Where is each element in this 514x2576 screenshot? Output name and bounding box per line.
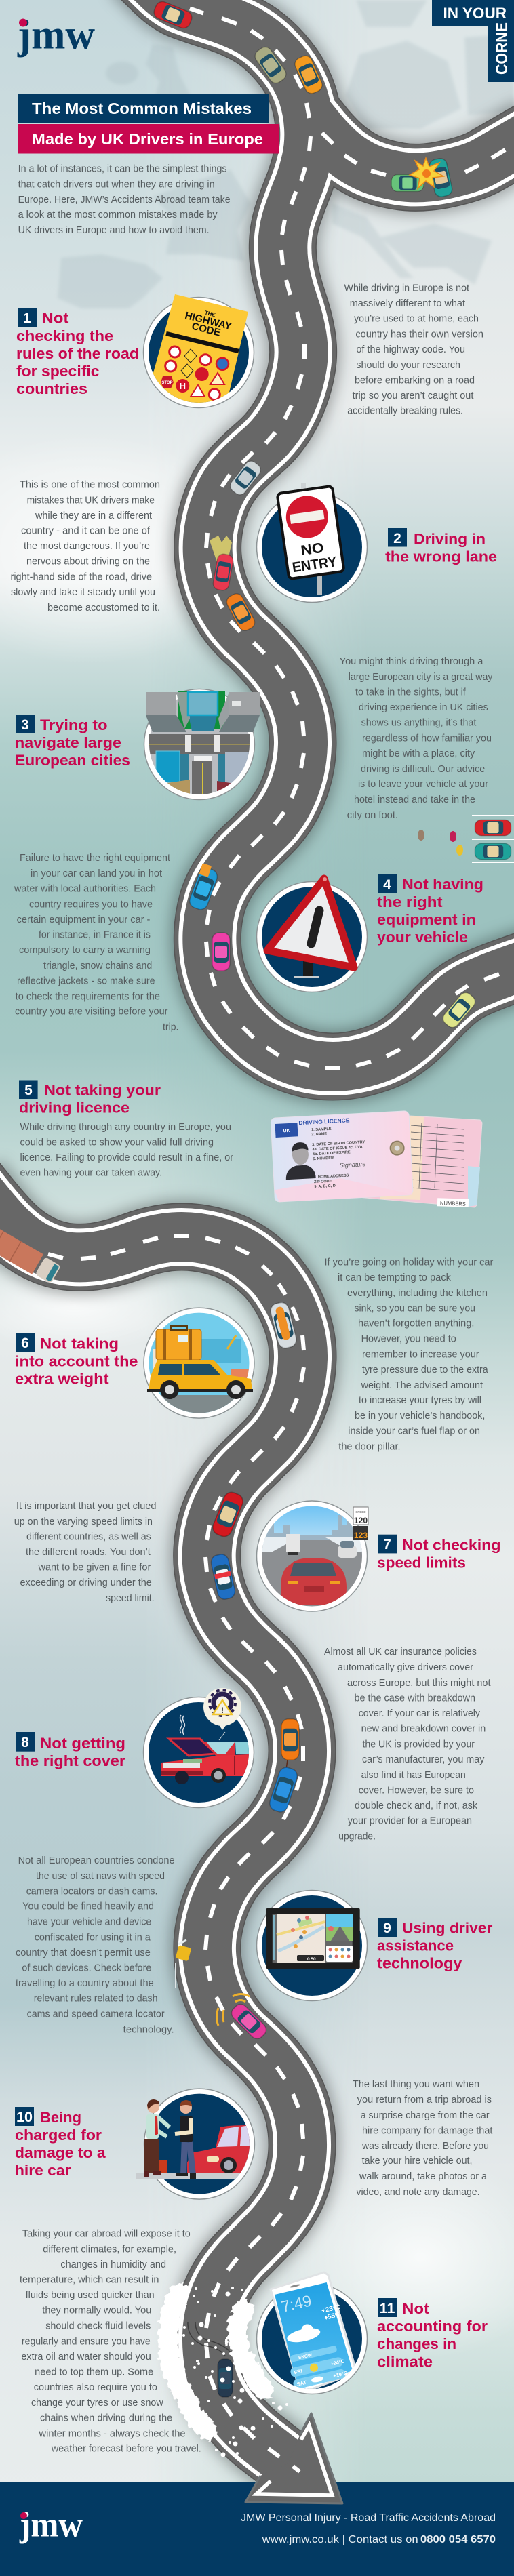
body text 6: However, you need to xyxy=(361,1334,456,1345)
body text 8: across Europe, but this might not xyxy=(347,1678,491,1689)
body text 1: massively different to what xyxy=(350,298,465,309)
body text 11: winter months - always check the xyxy=(38,2428,186,2439)
road arrow head over the footer xyxy=(245,2413,342,2503)
icon: speed limit scene: 120 xyxy=(354,1516,368,1525)
footer logo: jmw xyxy=(19,2506,83,2545)
heading 5: 5 xyxy=(24,1083,33,1098)
body text 5: could be asked to show your valid full driving xyxy=(20,1137,214,1148)
body text 1 xyxy=(344,283,483,417)
licence front: 2. NAME xyxy=(311,1132,328,1137)
body text 11: chains when driving during the xyxy=(40,2413,172,2423)
body text 4 xyxy=(14,853,178,1033)
body text 1: before embarking on a road xyxy=(355,375,475,386)
figure: man on the left xyxy=(144,2099,170,2177)
licence front: 9. A, B, C, D xyxy=(314,1184,336,1189)
heading 10: charged for xyxy=(15,2127,102,2144)
body text 6: remember to increase your xyxy=(362,1349,479,1360)
body text 9: cams and speed camera locator xyxy=(27,2009,165,2020)
body text 9 xyxy=(16,1855,175,2035)
heading 8: Not getting xyxy=(40,1735,125,1752)
body text 3: driving is difficult. Our advice xyxy=(361,764,485,775)
body text 7: want to be given a fine for xyxy=(38,1563,151,1573)
licence front: 4a. DATE OF ISSUE 4c. DVA xyxy=(312,1145,363,1152)
licence front: 5. NUMBER xyxy=(313,1156,334,1161)
body text 9: confiscated for using it in a xyxy=(35,1932,151,1943)
heading 5: Not taking your xyxy=(44,1082,161,1098)
body text 4: reflective jackets - so make sure xyxy=(17,975,155,986)
icon: speed limit scene: SPEED xyxy=(355,1510,366,1514)
body text 4: in your car can land you in hot xyxy=(31,868,162,879)
body text 6: tyre pressure due to the extra xyxy=(362,1365,489,1375)
body text 7: different countries, as well as xyxy=(26,1531,151,1542)
body text 6: it can be tempting to pack xyxy=(338,1272,452,1283)
body text 1: country has their own version xyxy=(355,329,483,340)
body text 7: speed limit. xyxy=(106,1593,155,1604)
icon: sat nav xyxy=(256,1890,368,2001)
body text 3: You might think driving through a xyxy=(340,656,483,667)
body text 2: country - and it can be one of xyxy=(21,525,151,536)
heading 3: European cities xyxy=(15,752,130,769)
heading 6: Not taking xyxy=(40,1335,119,1352)
body text 5: even having your car taken away. xyxy=(20,1168,162,1179)
body text 2: This is one of the most common xyxy=(20,480,160,491)
icon: driving licence cards xyxy=(271,1111,482,1207)
body text 7: exceeding or driving under the xyxy=(20,1577,152,1588)
body text 4: to check the requirements for the xyxy=(16,991,160,1002)
icon: warning speech bubble: ! xyxy=(221,1706,224,1715)
icon: weather app phone: +19°C xyxy=(332,2370,349,2379)
icon: weather app phone: SAT xyxy=(296,2379,307,2388)
licence front: 3. DATE OF BIRTH COUNTRY xyxy=(312,1140,365,1147)
footer contact details: www.jmw.co.uk | Contact us on xyxy=(262,2534,418,2545)
heading 3: 3 xyxy=(21,717,29,733)
heading 7: speed limits xyxy=(377,1554,466,1571)
icon: highway code book xyxy=(144,294,254,408)
body text 10: you return from a trip abroad is xyxy=(357,2095,492,2106)
body text 3: hotel instead and take in the xyxy=(354,794,475,805)
icon: broken down car xyxy=(144,1688,254,1807)
icon: sat nav: 0.50 xyxy=(307,1957,316,1962)
licence front: UK xyxy=(283,1129,290,1133)
body text 8: cover. However, be sure to xyxy=(359,1785,474,1796)
heading 2 xyxy=(385,528,497,565)
body text 1: While driving in Europe is not xyxy=(344,283,469,294)
section 5: driving licence xyxy=(19,1081,482,1207)
body text 1: accidentally breaking rules. xyxy=(347,406,463,417)
body text 1: of the highway code. You xyxy=(356,344,465,355)
title: The Most Common Mistakes xyxy=(32,100,252,117)
figure: man on the right xyxy=(175,2100,196,2179)
body text 5 xyxy=(20,1122,233,1179)
icon: highway code book: CODE xyxy=(191,321,222,339)
body text 4: country you are visiting before your xyxy=(15,1007,168,1018)
heading 9: assistance xyxy=(377,1937,454,1954)
body text 9: You could be fined heavily and xyxy=(22,1901,154,1912)
heading 9: technology xyxy=(377,1955,462,1972)
logo: jmw xyxy=(17,12,95,58)
body text 11: they normally would. You xyxy=(42,2306,151,2316)
body text 4: triangle, snow chains and xyxy=(43,961,152,971)
speed camera xyxy=(176,1940,191,1988)
body text 4: compulsory to carry a warning xyxy=(19,945,151,956)
body text 8: be the case with breakdown xyxy=(354,1693,475,1704)
heading 1: 1 xyxy=(23,310,31,326)
heading 9: 9 xyxy=(383,1920,391,1936)
body text 3: to take in the sights, but if xyxy=(355,687,467,698)
intro text: UK drivers in Europe and how to avoid them. xyxy=(18,225,210,236)
body text 5: While driving through any country in Europe, you xyxy=(20,1122,231,1133)
heading 5: driving licence xyxy=(19,1100,130,1116)
body text 8 xyxy=(324,1647,491,1843)
footer contact details xyxy=(241,2512,496,2545)
body text 8: the UK is provided by your xyxy=(362,1739,475,1750)
intro text: that catch drivers out when they are driving in xyxy=(18,179,215,190)
heading 4 xyxy=(377,874,483,946)
icon: highway code book: THE xyxy=(204,310,216,318)
section 6: extra weight xyxy=(15,1257,494,1452)
body text 6: be in your vehicle’s handbook, xyxy=(355,1411,485,1422)
body text 4: water with local authorities. Each xyxy=(14,884,156,895)
body text 8: your provider for a European xyxy=(348,1816,472,1827)
icon: weather app phone: ♦55% xyxy=(323,2311,342,2322)
icon: city junction xyxy=(144,689,260,802)
icon: highway code book: HIGHWAY xyxy=(184,310,233,332)
licence front: Signature xyxy=(340,1161,366,1169)
section 3: cities xyxy=(15,656,493,821)
body text 8: double check and, if not, ask xyxy=(355,1800,478,1811)
body text 9: the use of sat navs with speed xyxy=(36,1871,165,1882)
body text 4: Failure to have the right equipment xyxy=(20,853,170,864)
heading 2: Driving in xyxy=(414,530,486,547)
body text 7: It is important that you get clued xyxy=(16,1501,156,1512)
heading 4: equipment in xyxy=(377,911,476,928)
body text 8: upgrade. xyxy=(338,1832,376,1843)
body text 2: right-hand side of the road, drive xyxy=(11,572,152,583)
heading 7 xyxy=(377,1535,500,1571)
title xyxy=(18,94,279,153)
body text 2: the most dangerous. If you’re xyxy=(24,541,150,552)
section 9: driver assistance xyxy=(16,1855,493,2035)
body text 8: Almost all UK car insurance policies xyxy=(324,1647,477,1657)
body text 11: should check fluid levels xyxy=(45,2321,151,2332)
heading 4: your vehicle xyxy=(377,929,468,946)
heading 4: Not having xyxy=(402,876,483,893)
icon: weather app phone xyxy=(256,2272,368,2394)
icon: weather app phone: +23°C xyxy=(321,2303,341,2315)
body text 4: trip. xyxy=(163,1022,178,1033)
body text 10: The last thing you want when xyxy=(353,2079,479,2090)
corner badge: in your corner: CORNE xyxy=(493,22,511,75)
body text 9: technology. xyxy=(123,2024,174,2035)
heading 3: Trying to xyxy=(40,717,107,733)
heading 4: 4 xyxy=(383,877,391,893)
section 2: wrong lane xyxy=(11,480,497,613)
icon: hire car handover xyxy=(136,2089,255,2199)
icon: warning speech bubble xyxy=(203,1688,241,1730)
body text 8: car’s manufacturer, you may xyxy=(362,1754,485,1765)
heading 11: accounting for xyxy=(377,2318,488,2335)
body text 2: become accustomed to it. xyxy=(47,603,160,613)
section 4: equipment xyxy=(14,853,483,1033)
body text 1: you’re used to at home, each xyxy=(354,314,479,325)
heading 8: the right cover xyxy=(15,1752,125,1769)
body text 1: trip so you aren’t caught out xyxy=(353,390,473,401)
intro text: a look at the most common mistakes made by xyxy=(18,209,218,220)
heading 7: Not checking xyxy=(402,1536,500,1554)
heading 10: Being xyxy=(40,2109,81,2126)
icon: car with luggage xyxy=(144,1308,254,1418)
icon: highway code book: H xyxy=(180,381,186,391)
body text 3: is to leave your vehicle at your xyxy=(358,779,488,790)
body text 9: camera locators or dash cams. xyxy=(26,1886,158,1897)
heading 11: changes in xyxy=(377,2335,456,2352)
crash on the branch road xyxy=(391,157,454,198)
body text 9: Not all European countries condone xyxy=(18,1855,175,1866)
body text 6: everything, including the kitchen xyxy=(347,1288,488,1299)
footer contact details: 0800 054 6570 xyxy=(420,2534,496,2545)
section 8: right cover xyxy=(15,1647,491,1843)
icon: speed limit scene xyxy=(256,1501,368,1611)
footer band xyxy=(0,2482,514,2576)
body text 8: cover. If your car is relatively xyxy=(359,1708,481,1719)
body text 10: a surprise charge from the car xyxy=(361,2110,490,2121)
body text 11: countries also require you to xyxy=(34,2382,157,2393)
section 1: rules of the road xyxy=(16,283,483,417)
licence front: 4b. DATE OF EXPIRE xyxy=(313,1150,351,1156)
icon: no entry sign: NO xyxy=(300,540,325,559)
body text 10: was already there. Before you xyxy=(361,2141,489,2152)
icon: no entry sign xyxy=(256,483,368,602)
body text 1: should do your research xyxy=(356,360,460,371)
icon: no entry sign: ENTRY xyxy=(291,554,338,576)
body text 3: might be with a place, city xyxy=(362,748,475,759)
body text 2: mistakes that UK drivers make xyxy=(27,495,155,506)
body text 11 xyxy=(20,2229,201,2455)
body text 11: changes in humidity and xyxy=(60,2259,166,2270)
body text 3 xyxy=(340,656,493,821)
body text 7 xyxy=(14,1501,156,1604)
heading 9: Using driver xyxy=(402,1919,493,1936)
body text 2 xyxy=(11,480,160,613)
corner badge: in your corner xyxy=(432,0,514,82)
body text 10: take your hire vehicle out, xyxy=(362,2156,472,2167)
title: Made by UK Drivers in Europe xyxy=(32,130,263,148)
body text 11: extra oil and water should you xyxy=(21,2352,151,2362)
icon: weather app phone: SNOW xyxy=(298,2353,313,2360)
snow section xyxy=(168,2287,288,2457)
intro text: In a lot of instances, it can be the simplest things xyxy=(18,164,227,175)
body text 6: If you’re going on holiday with your car xyxy=(324,1257,494,1268)
body text 6 xyxy=(324,1257,494,1452)
licence front: ZIP CODE xyxy=(314,1180,332,1184)
body text 10: hire company for damage that xyxy=(362,2125,492,2136)
heading 8 xyxy=(15,1732,125,1769)
heading 11: climate xyxy=(377,2353,433,2370)
body text 8: new and breakdown cover in xyxy=(361,1724,486,1735)
licence front: 8. HOME ADDRESS xyxy=(314,1173,349,1180)
footer contact details: JMW Personal Injury - Road Traffic Accidents Abroad xyxy=(241,2512,496,2524)
car park and pedestrians xyxy=(418,816,514,862)
heading 6: into account the xyxy=(15,1353,138,1369)
body text 3: regardless of how familiar you xyxy=(362,733,492,744)
body text 10: walk around, take photos or a xyxy=(359,2171,488,2182)
heading 6: extra weight xyxy=(15,1371,109,1388)
heading 7: 7 xyxy=(383,1537,391,1552)
body text 9: of such devices. Check before xyxy=(22,1963,151,1973)
licence front: DRIVING LICENCE xyxy=(298,1116,350,1126)
body text 2: slowly and take it steady until you xyxy=(11,587,155,598)
body text 11: change your tyres or use snow xyxy=(31,2398,163,2409)
heading 1: countries xyxy=(16,380,87,397)
body text 3: driving experience in UK cities xyxy=(359,702,488,713)
intro text: Europe. Here, JMW’s Accidents Abroad team take xyxy=(18,195,231,205)
heading 11 xyxy=(377,2298,488,2370)
section 7: speed limits xyxy=(14,1501,501,1611)
body text 9: country that doesn’t permit use xyxy=(16,1948,151,1958)
heading 1: checking the xyxy=(16,327,113,344)
section 10: hire car xyxy=(15,2079,492,2199)
body text 11: weather forecast before you travel. xyxy=(51,2444,201,2455)
heading 1: for specific xyxy=(16,363,99,380)
body text 5: licence. Failing to provide could result in a fine, or xyxy=(20,1152,233,1163)
body text 6: haven’t forgotten anything. xyxy=(358,1319,474,1329)
body text 11: different climates, for example, xyxy=(43,2244,176,2255)
body text 3: city on foot. xyxy=(347,810,398,821)
icon: weather app phone: +24°C xyxy=(330,2358,346,2367)
heading 1 xyxy=(16,308,139,397)
body text 6: weight. The advised amount xyxy=(361,1380,483,1391)
body text 9: relevant rules related to dash xyxy=(34,1994,157,2005)
heading 10: hire car xyxy=(15,2162,71,2179)
body text 9: have your vehicle and device xyxy=(27,1917,151,1928)
heading 1: Not xyxy=(41,310,69,327)
heading 6: 6 xyxy=(21,1335,29,1351)
section 11: climate xyxy=(20,2229,488,2455)
heading 11: 11 xyxy=(380,2301,395,2316)
licence front: 1. SAMPLE xyxy=(311,1127,332,1132)
heading 2: the wrong lane xyxy=(385,548,497,565)
icon: warning triangle xyxy=(256,877,368,992)
heading 6 xyxy=(15,1333,138,1388)
body text 8: automatically give drivers cover xyxy=(338,1662,473,1673)
body text 3: shows us anything, it’s that xyxy=(361,718,476,729)
body text 11: Taking your car abroad will expose it to xyxy=(22,2229,191,2240)
heading 5 xyxy=(19,1081,161,1116)
heading 4: the right xyxy=(377,893,443,910)
heading 3: navigate large xyxy=(15,734,121,751)
body text 4: country requires you to have xyxy=(29,899,153,910)
body text 2: while they are in a different xyxy=(35,510,152,521)
icon: highway code book: STOP xyxy=(161,381,173,385)
heading 3 xyxy=(15,715,130,769)
body text 10 xyxy=(353,2079,492,2198)
heading 2: 2 xyxy=(393,531,401,546)
body text 6: the door pillar. xyxy=(338,1441,401,1452)
body text 11: temperature, which can result in xyxy=(20,2274,159,2285)
body text 4: certain equipment in your car - xyxy=(17,914,151,925)
corner badge: in your corner: IN YOUR xyxy=(443,5,507,22)
body text 6: to increase your tyres by will xyxy=(359,1395,481,1406)
body text 10: video, and note any damage. xyxy=(356,2187,480,2198)
body text 11: regularly and ensure you have xyxy=(22,2336,151,2347)
body text 7: the different roads. You don’t xyxy=(26,1547,151,1558)
heading 1: rules of the road xyxy=(16,345,139,362)
body text 9: travelling to a country about the xyxy=(16,1978,154,1989)
body text 3: large European city is a great way xyxy=(349,672,493,683)
intro text xyxy=(18,164,231,236)
body text 6: sink, so you can be sure you xyxy=(354,1303,475,1314)
body text 11: need to top them up. Some xyxy=(35,2367,153,2378)
body text 6: inside your car’s fuel flap or on xyxy=(348,1426,480,1437)
background map of Europe xyxy=(58,0,514,308)
heading 9 xyxy=(377,1918,493,1972)
heading 10 xyxy=(15,2107,106,2179)
icon: weather app phone: FRI xyxy=(294,2368,303,2375)
licence back xyxy=(357,1116,482,1207)
heading 10: damage to a xyxy=(15,2144,106,2161)
heading 10: 10 xyxy=(16,2110,33,2125)
body text 7: up on the varying speed limits in xyxy=(14,1516,153,1527)
heading 11: Not xyxy=(402,2300,430,2317)
body text 4: for instance, in France it is xyxy=(39,930,151,941)
body text 2: nervous about driving on the xyxy=(26,557,150,567)
icon: speed limit scene: 123 xyxy=(354,1531,368,1540)
licence back: NUMBERS xyxy=(440,1200,466,1207)
cars on the road xyxy=(0,0,477,2042)
body text 11: fluids being used quicker than xyxy=(26,2290,155,2301)
body text 8: also find it has European xyxy=(361,1770,466,1781)
licence front xyxy=(271,1111,413,1202)
icon: weather app phone: 7:49 xyxy=(279,2291,313,2316)
heading 8: 8 xyxy=(21,1735,29,1750)
